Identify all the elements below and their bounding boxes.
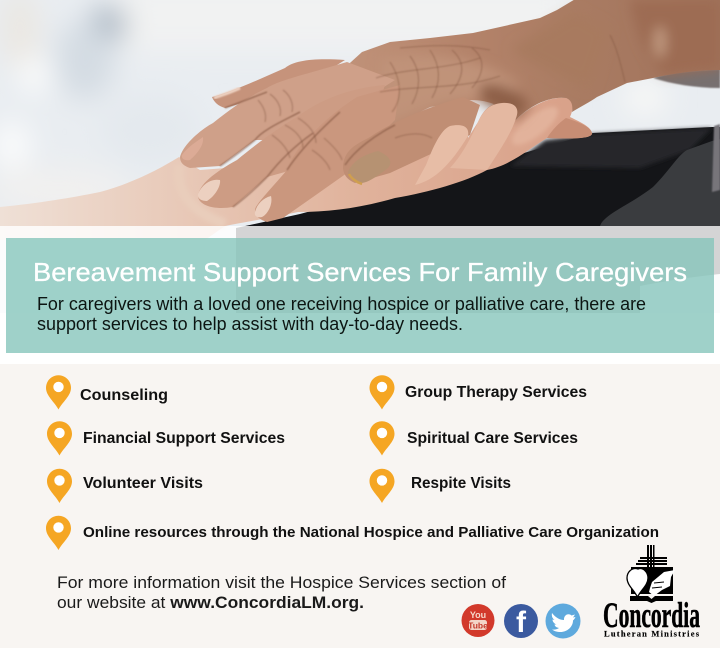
- title: Bereavement Support Services For Family Caregivers: [33, 257, 687, 287]
- service: Respite Visits: [370, 469, 511, 503]
- icon: YouTube: Tube: [468, 620, 488, 630]
- fingernails: [182, 137, 390, 217]
- elderly middle finger: [198, 85, 385, 208]
- sleeve edge: [653, 69, 720, 88]
- service: Online resources: [46, 516, 659, 550]
- icon: YouTube: [462, 604, 494, 637]
- elderly ring finger: [255, 85, 400, 222]
- icon: YouTube: You: [470, 610, 486, 620]
- young palm highlights: [211, 107, 558, 225]
- service: Counseling: Counseling: [80, 387, 168, 404]
- young pinky shade: [547, 118, 592, 139]
- icon: Twitter: [546, 604, 580, 638]
- service: Spiritual Care Services: Spiritual Care Services: [407, 430, 578, 447]
- service: Financial Support Services: Financial Support Services: [83, 430, 285, 447]
- footer text: [57, 573, 506, 612]
- elderly thumb: [343, 97, 480, 183]
- logo tagline: Lutheran Ministries: [604, 628, 700, 638]
- banner: teal title panel: support services to help assist with day-to-day needs.: [37, 314, 463, 334]
- young fingers over thumb: [415, 125, 468, 185]
- panel: hands photograph: [0, 0, 720, 313]
- intro text: For caregivers with a loved one receiving hospice or palliative care, there are: [37, 294, 646, 314]
- service: Volunteer Visits: Volunteer Visits: [83, 475, 203, 492]
- footer text: For more information visit the Hospice Services section of: [57, 573, 506, 592]
- footer text: our website at www.ConcordiaLM.org.: [57, 593, 364, 612]
- service: Volunteer Visits: [47, 469, 203, 503]
- service: Respite Visits: Respite Visits: [411, 475, 511, 492]
- icon: Facebook: [504, 604, 538, 639]
- wrinkles: [258, 35, 625, 170]
- logo emblem: [627, 545, 675, 603]
- logo: Concordia Lutheran Ministries: [603, 545, 700, 638]
- panel: services section background: [0, 364, 720, 648]
- young hand: [0, 98, 592, 240]
- service: Group Therapy Services: [370, 375, 587, 410]
- service: Counseling: [46, 375, 168, 410]
- wrist shading: [380, 0, 720, 125]
- white wash band below the photo: [0, 226, 720, 313]
- finger creases: [220, 92, 395, 207]
- dark fabric: [236, 127, 720, 313]
- service: Group Therapy Services: Group Therapy Services: [405, 384, 587, 401]
- fabric continuation under the wash: [640, 274, 720, 313]
- service: Spiritual Care Services: [370, 421, 578, 456]
- elderly hand: back of hand and wrist: [350, 0, 720, 126]
- back finger: [212, 59, 345, 108]
- service: Financial Support Services: [47, 421, 285, 456]
- elderly index finger: [180, 62, 395, 168]
- icon: Facebook: f: [516, 606, 527, 639]
- service: Online resources: Online resources through the National Hospice and Palliative Care Organization: [83, 525, 659, 541]
- banner: teal title panel: [6, 238, 714, 353]
